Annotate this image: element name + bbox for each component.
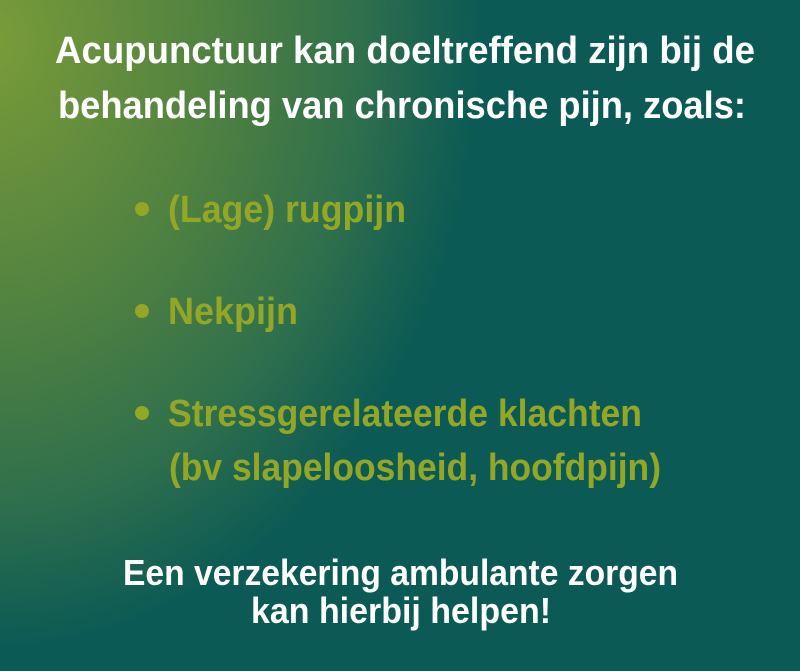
list item: stressgerelateerde klachten: Stressgerelateerde klachten — [168, 393, 642, 435]
closing message: kan hierbij helpen! — [251, 590, 551, 631]
title: behandeling van chronische pijn, zoals: — [58, 85, 746, 127]
closing message — [123, 552, 678, 631]
closing message: Een verzekering ambulante zorgen — [123, 552, 678, 593]
list item: lage rugpijn: (Lage) rugpijn — [168, 189, 406, 231]
list of complaints — [135, 189, 661, 489]
list item: stressgerelateerde klachten — [135, 393, 661, 489]
list item: nekpijn: Nekpijn — [168, 291, 298, 333]
list item: stressgerelateerde klachten: (bv slapeloosheid, hoofdpijn) — [169, 447, 661, 489]
title: Acupunctuur kan doeltreffend zijn bij de — [55, 30, 755, 72]
title — [55, 30, 755, 127]
